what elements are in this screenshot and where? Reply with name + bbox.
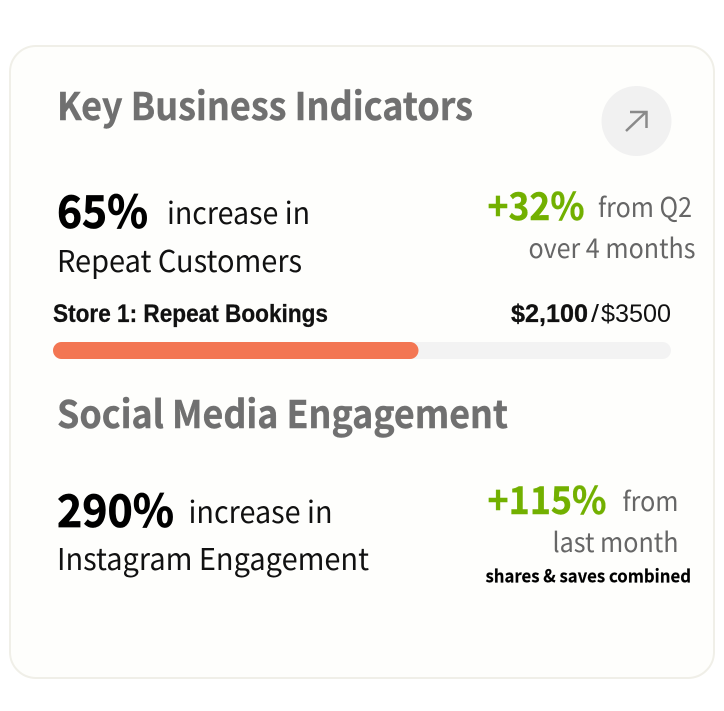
stat: 65% increase in repeat customers <box>57 176 310 281</box>
stat: 65% increase in repeat customers: 65% <box>57 176 148 241</box>
stat: +32% from Q2 over 4 months: over 4 months <box>528 227 696 266</box>
stat: +32% from Q2 over 4 months: +32% <box>488 176 584 231</box>
note: shares and saves combined: shares & saves combined <box>486 562 691 588</box>
heading: Key Business Indicators: Key Business Indicators <box>57 76 473 131</box>
icon: arrow button <box>602 86 672 156</box>
stat: 290% increase in Instagram engagement: Instagram Engagement <box>57 535 369 579</box>
progress bar <box>53 342 671 359</box>
stat: +115% from last month: from <box>622 480 678 519</box>
heading: Social Media Engagement: Social Media Engagement <box>57 384 508 439</box>
progress value: $2,100 / $3500: / <box>591 300 599 328</box>
stat: 65% increase in repeat customers: Repeat Customers <box>57 237 302 281</box>
progress value: $2,100 / $3500: $2,100 <box>511 300 588 328</box>
section: social media engagement <box>57 384 691 588</box>
progress label: Store 1 Repeat Bookings: Store 1: Repeat Bookings <box>53 300 328 328</box>
stat: +115% from last month: +115% <box>488 470 606 525</box>
stat: +115% from last month <box>488 470 678 560</box>
stat: +32% from Q2 over 4 months: from Q2 <box>598 186 692 225</box>
stat: +32% from Q2 over 4 months <box>488 176 696 266</box>
stat: 290% increase in Instagram engagement <box>57 475 369 579</box>
progress value: $2,100 / $3500: $3500 <box>601 300 671 328</box>
section: key business indicators <box>53 76 696 359</box>
stat: 65% increase in repeat customers: increase in <box>167 189 310 233</box>
stat: 290% increase in Instagram engagement: increase in <box>188 488 332 532</box>
progress value: $2,100 / $3500 <box>511 300 671 328</box>
stat: 290% increase in Instagram engagement: 290% <box>57 475 174 540</box>
stat: +115% from last month: last month <box>552 521 678 560</box>
